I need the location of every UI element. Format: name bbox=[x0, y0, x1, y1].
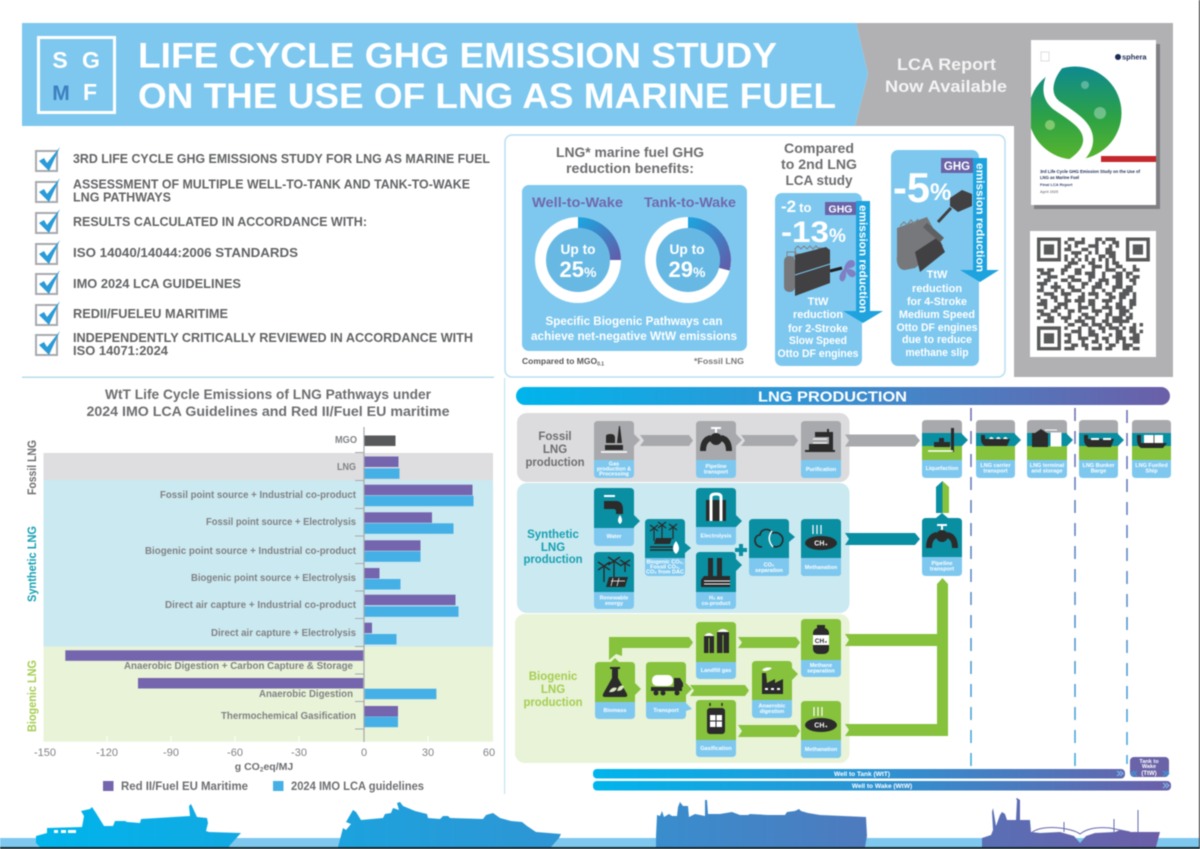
card: purification bbox=[801, 421, 841, 478]
card: 4-stroke engines: due to reduce bbox=[902, 334, 972, 346]
card: biomass: Biomass bbox=[604, 708, 626, 714]
card: methanation bbox=[801, 701, 841, 758]
card: water bbox=[594, 488, 640, 546]
card: renewable energy: energy bbox=[605, 601, 624, 607]
card: methane separation: separation bbox=[807, 668, 836, 674]
arrow: gasification to methanation bbox=[738, 725, 800, 737]
card: anaerobic digestion: digestion bbox=[760, 709, 785, 715]
card: methanation: Methanation bbox=[805, 565, 838, 571]
card: gas production: production & bbox=[597, 466, 631, 472]
donut: up to 25%: Up to bbox=[560, 241, 596, 257]
pathway labels: Direct air capture + Industrial co-product bbox=[165, 599, 356, 611]
card: biomass bbox=[595, 658, 641, 719]
card: purification: Purification bbox=[806, 467, 837, 473]
bar: well to wake bbox=[593, 781, 1171, 790]
bars: Red II/Fuel EU Maritime bbox=[65, 456, 473, 716]
card: LNG terminal and storage bbox=[1027, 420, 1073, 478]
bars: 2024 IMO LCA guidelines bbox=[364, 468, 474, 727]
card: CO2 separation: separation bbox=[755, 568, 784, 574]
donut: up to 29%: Up to bbox=[670, 241, 704, 257]
box: tank to wake: Tank to bbox=[1139, 759, 1159, 765]
card: LNG terminal and storage: LNG terminal bbox=[1030, 463, 1065, 469]
check item 4: ISO 14040/14044:2006 STANDARDS bbox=[73, 246, 298, 260]
pathway labels: Anaerobic Digestion bbox=[259, 688, 353, 700]
chart title: WtT Life Cycle Emissions of LNG Pathways under bbox=[105, 387, 432, 402]
report cover bbox=[1028, 40, 1160, 209]
check item 2 bbox=[36, 178, 470, 204]
arrow: emission reduction: emission reduction bbox=[856, 205, 868, 313]
arrow: transport to anaerobic bbox=[690, 685, 749, 696]
box: tank to wake bbox=[1130, 757, 1169, 777]
card: LNG carrier transport: transport bbox=[983, 468, 1008, 474]
group label: biogenic LNG: Biogenic LNG bbox=[25, 660, 39, 732]
arrow: biogenic supply to pipeline bbox=[845, 578, 948, 736]
card: gas production: Gas bbox=[609, 462, 619, 468]
card: electrolysis: Electrolysis bbox=[701, 534, 731, 540]
card: 2-stroke engines: Slow Speed bbox=[789, 335, 847, 347]
card: methanation: Methanation bbox=[805, 747, 838, 753]
donut: up to 29%: 29% bbox=[669, 257, 706, 282]
card: biogenic CO2 bbox=[645, 519, 691, 576]
pathway labels bbox=[124, 434, 357, 722]
card: CO2 separation: CO₂ bbox=[764, 562, 775, 568]
card: 2-stroke engines: Otto DF engines bbox=[778, 348, 858, 360]
chart title bbox=[86, 387, 450, 419]
card: CO2 separation bbox=[749, 519, 795, 576]
card: transport: Transport bbox=[653, 708, 679, 714]
legend bbox=[103, 781, 424, 793]
legend: Red II/Fuel EU Maritime bbox=[121, 781, 248, 793]
pathway labels: Anaerobic Digestion + Carbon Capture & Storage bbox=[124, 660, 353, 672]
arrow: purification to liquefaction bbox=[845, 434, 920, 446]
card: LNG bunker barge bbox=[1079, 420, 1124, 478]
card: methanation: CH₄ bbox=[814, 540, 828, 548]
footnote: compared to MGO: 0.1 bbox=[597, 362, 604, 368]
card: anaerobic digestion: Anaerobic bbox=[759, 704, 785, 710]
arrow: pipeline to purification bbox=[741, 435, 798, 446]
card: pipeline transport: Pipeline bbox=[931, 561, 953, 567]
ship: cruise ship bbox=[338, 802, 561, 847]
card: LNG fuelled ship: Ship bbox=[1146, 468, 1158, 474]
heading bar: LNG production: LNG PRODUCTION bbox=[758, 388, 907, 406]
pathway labels: Fossil point source + Industrial co-product bbox=[160, 489, 356, 501]
report cover: 3rd Life Cycle GHG Emission Study on the Use of bbox=[1040, 169, 1141, 174]
card: anaerobic digestion bbox=[752, 661, 798, 718]
arrow: emission reduction bbox=[843, 201, 883, 323]
label: GHG bbox=[825, 202, 856, 216]
report cover: April 2025 bbox=[1040, 190, 1058, 194]
card: 2-stroke engines: -13 bbox=[781, 216, 829, 249]
card: gas production bbox=[594, 421, 640, 478]
heading: compared to 2nd study: Compared bbox=[784, 140, 854, 156]
panel: well-to-wake and tank-to-wake donuts: Well-to-Wake bbox=[532, 194, 623, 210]
x axis: eq/MJ bbox=[263, 761, 293, 773]
panel: fossil LNG production: Fossil bbox=[538, 431, 572, 443]
panel: fossil LNG production bbox=[517, 413, 920, 482]
card: 4-stroke engines: -5 bbox=[893, 164, 930, 211]
icon: 4-stroke engine bbox=[897, 190, 972, 272]
x axis: 2 bbox=[260, 766, 264, 774]
bar: well to tank: Well to Tank (WtT) bbox=[834, 771, 890, 778]
pathway labels: LNG bbox=[337, 461, 356, 473]
check item 5: IMO 2024 LCA GUIDELINES bbox=[73, 277, 241, 291]
heading: benefits: LNG* marine fuel GHG bbox=[556, 144, 704, 160]
panel: biogenic LNG production: LNG bbox=[541, 684, 565, 696]
card: liquefaction bbox=[922, 420, 968, 478]
band: fossil bbox=[44, 453, 493, 480]
check item 2: ASSESSMENT OF MULTIPLE WELL-TO-TANK AND TANK-TO-WAKE bbox=[73, 178, 470, 192]
card: biogenic CO2: CO₂ from DAC bbox=[646, 570, 684, 576]
report cover: Final LCA Report bbox=[1040, 182, 1073, 187]
card: 4-stroke engines: reduction bbox=[912, 283, 962, 295]
card: LNG carrier transport: LNG carrier bbox=[980, 463, 1011, 469]
arrow: emission reduction bbox=[960, 158, 999, 282]
panel: well-to-wake and tank-to-wake donuts: Specific Biogenic Pathways can bbox=[546, 316, 722, 328]
card: H2 as co-product: co-product bbox=[702, 601, 731, 607]
card: gasification: Gasification bbox=[700, 746, 732, 752]
panel: fossil LNG production: production bbox=[526, 457, 584, 469]
heading: compared to 2nd study: LCA study bbox=[786, 172, 853, 188]
card: 2-stroke engines: -2to bbox=[781, 197, 811, 216]
report cover: sphera bbox=[1122, 52, 1147, 62]
heading: compared to 2nd study bbox=[781, 140, 857, 188]
panel: biogenic LNG production: Biogenic bbox=[529, 671, 578, 683]
report callout: LCA Report bbox=[897, 55, 996, 74]
footnote: compared to MGO: Compared to MGO bbox=[522, 356, 597, 366]
panel: biogenic LNG production: production bbox=[524, 697, 582, 709]
card: pipeline transport: transport bbox=[930, 566, 954, 572]
card: LNG terminal and storage: and storage bbox=[1031, 468, 1063, 474]
card: LNG bunker barge: Barge bbox=[1091, 468, 1106, 474]
card: 4-stroke engines: TtW bbox=[927, 269, 948, 281]
logo: SGMF: F bbox=[83, 79, 97, 105]
bar: well to tank bbox=[593, 769, 1125, 778]
x axis: -120 bbox=[96, 747, 118, 759]
legend: 2024 IMO LCA guidelines bbox=[291, 781, 424, 793]
card: methanation: CH₄ bbox=[814, 722, 828, 730]
panel: synthetic LNG production: Synthetic bbox=[527, 529, 579, 541]
panel: reduction benefits bbox=[505, 135, 1005, 377]
card: pipeline transport bbox=[696, 421, 742, 478]
card: biogenic CO2: Fossil CO₂, bbox=[650, 564, 680, 570]
card: 4-stroke engines: Otto DF engines bbox=[896, 322, 978, 334]
ship: ferry bbox=[36, 804, 241, 847]
logo: SGMF: G bbox=[82, 47, 100, 73]
card: pipeline transport: Pipeline bbox=[705, 464, 727, 470]
card: 2-stroke engines: for 2-Stroke bbox=[788, 323, 848, 335]
card: water: Water bbox=[606, 534, 622, 540]
x axis: 30 bbox=[422, 747, 434, 759]
card: LNG fuelled ship: LNG Fuelled bbox=[1135, 463, 1168, 469]
card: 2-stroke engines: % bbox=[829, 226, 846, 247]
x axis: -150 bbox=[34, 747, 56, 759]
heading: compared to 2nd study: to 2nd LNG bbox=[781, 156, 857, 172]
check item 2: LNG PATHWAYS bbox=[73, 190, 171, 204]
card: 4-stroke engines: % bbox=[930, 179, 951, 206]
card: renewable energy bbox=[594, 552, 634, 609]
chart title: 2024 IMO LCA Guidelines and Red II/Fuel EU maritime bbox=[86, 404, 450, 419]
box: tank to wake: (TtW) bbox=[1141, 771, 1157, 777]
card: 4-stroke engines bbox=[891, 150, 999, 366]
check item 7: ISO 14071:2024 bbox=[73, 344, 168, 358]
pathway labels: Fossil point source + Electrolysis bbox=[206, 516, 356, 528]
donut: up to 29% bbox=[650, 222, 726, 298]
icon: 2-stroke engine bbox=[784, 246, 856, 296]
box: tank to wake: Wake bbox=[1142, 764, 1156, 770]
header banner bbox=[22, 23, 1173, 377]
heading: benefits: reduction benefits: bbox=[566, 160, 694, 176]
pathway labels: Thermochemical Gasification bbox=[221, 710, 356, 722]
checklist bbox=[36, 147, 490, 358]
chart: WtT life cycle emissions bbox=[25, 387, 495, 793]
LNG production diagram bbox=[515, 387, 1171, 790]
logo: SGMF: S bbox=[52, 47, 68, 73]
card: transport bbox=[646, 662, 692, 719]
card: 4-stroke engines: methane slip bbox=[906, 347, 969, 359]
check item 1: 3RD LIFE CYCLE GHG EMISSIONS STUDY FOR LNG AS MARINE FUEL bbox=[73, 152, 490, 166]
card: methanation bbox=[801, 519, 841, 576]
card: renewable energy: Renewable bbox=[600, 596, 628, 602]
card: 4-stroke engines: for 4-Stroke bbox=[907, 296, 967, 308]
ship silhouettes bbox=[36, 798, 1160, 847]
label: GHG: GHG bbox=[944, 161, 970, 173]
pathway labels: Biogenic point source + Industrial co-product bbox=[145, 545, 356, 557]
card: biogenic CO2: Biogenic CO₂, bbox=[647, 560, 684, 566]
check item 7 bbox=[36, 331, 473, 358]
heading: benefits bbox=[556, 144, 704, 176]
donut: up to 25%: 25% bbox=[560, 257, 597, 282]
card: H2 as co-product: H₂ as bbox=[709, 596, 723, 602]
check item 6: REDII/FUELEU MARITIME bbox=[73, 307, 228, 321]
card: landfill gas bbox=[696, 622, 736, 679]
card: 4-stroke engines: Medium Speed bbox=[899, 309, 975, 321]
x axis: g CO bbox=[235, 761, 260, 773]
check item 1 bbox=[36, 147, 490, 171]
card: LNG bunker barge: LNG Bunker bbox=[1082, 463, 1115, 469]
pathway labels: Biogenic point source + Electrolysis bbox=[191, 572, 356, 584]
card: electrolysis bbox=[696, 488, 742, 545]
card: methane separation: CH₄ bbox=[815, 638, 827, 645]
label: GHG: GHG bbox=[829, 204, 852, 216]
band: synthetic bbox=[44, 480, 493, 647]
label: GHG bbox=[941, 158, 973, 173]
pathway labels: MGO bbox=[335, 434, 357, 446]
panel: synthetic LNG production bbox=[517, 483, 920, 613]
panel: well-to-wake and tank-to-wake donuts bbox=[522, 185, 747, 351]
bottom edge bbox=[0, 847, 1200, 849]
card: pipeline transport bbox=[922, 513, 962, 576]
bar: MGO bbox=[364, 436, 396, 446]
x axis: 0 bbox=[361, 747, 367, 759]
QR code bbox=[1030, 231, 1156, 357]
logo: SGMF: M bbox=[52, 82, 70, 105]
title bbox=[138, 36, 836, 116]
logo: SGMF bbox=[38, 38, 114, 112]
footnote: fossil LNG: *Fossil LNG bbox=[694, 356, 744, 366]
card: liquefaction: Liquefaction bbox=[926, 466, 959, 472]
x axis: -30 bbox=[291, 747, 307, 759]
card: H2 as co-product bbox=[696, 552, 742, 609]
donut: up to 25% bbox=[540, 222, 616, 298]
x axis bbox=[34, 747, 495, 774]
card: 2-stroke engines bbox=[775, 193, 883, 366]
report cover: LNG as Marine Fuel bbox=[1040, 175, 1079, 180]
ship: LNG tanker bbox=[982, 798, 1160, 847]
card: gas production: Processing bbox=[599, 472, 629, 478]
band: biogenic bbox=[44, 647, 493, 742]
ship: car carrier bbox=[656, 800, 867, 847]
check item 5 bbox=[36, 270, 241, 294]
pathway labels: Direct air capture + Electrolysis bbox=[211, 627, 356, 639]
card: 2-stroke engines: reduction bbox=[793, 309, 843, 321]
water band bbox=[0, 838, 1200, 847]
check item 6 bbox=[36, 301, 228, 325]
report callout: Now Available bbox=[885, 77, 1007, 96]
arrow: pipeline to liquefaction bbox=[936, 481, 949, 513]
panel: synthetic LNG production: production bbox=[524, 554, 582, 566]
card: methane separation: Methane bbox=[810, 663, 832, 669]
arrow: fossil gas to pipeline bbox=[640, 435, 693, 446]
group label: synthetic LNG: Synthetic LNG bbox=[25, 526, 39, 602]
arrow: emission reduction: emission reduction bbox=[974, 163, 986, 272]
panel: well-to-wake and tank-to-wake donuts: achieve net-negative WtW emissions bbox=[531, 331, 737, 343]
card: 2-stroke engines: TtW bbox=[808, 296, 829, 308]
card: gasification bbox=[696, 700, 736, 757]
x axis: 60 bbox=[483, 747, 495, 759]
card: LNG carrier transport bbox=[976, 420, 1021, 478]
check item 3 bbox=[36, 209, 367, 233]
icon: plus bbox=[735, 544, 747, 556]
title: ON THE USE OF LNG AS MARINE FUEL bbox=[138, 77, 836, 116]
group label: fossil LNG: Fossil LNG bbox=[25, 440, 39, 495]
card: landfill gas: Landfill gas bbox=[701, 668, 731, 674]
arrow: methanation to pipeline bbox=[845, 533, 920, 545]
title: LIFE CYCLE GHG EMISSION STUDY bbox=[138, 36, 777, 76]
card: methane separation bbox=[801, 619, 841, 677]
card: LNG fuelled ship bbox=[1132, 420, 1171, 478]
card: pipeline transport: transport bbox=[704, 470, 728, 476]
arrow: landfill to methane separation bbox=[738, 637, 800, 648]
panel: synthetic LNG production: LNG bbox=[541, 542, 565, 554]
arrow: biomass to landfill bbox=[609, 637, 693, 660]
x axis: -60 bbox=[227, 747, 243, 759]
heading bar: LNG production bbox=[516, 387, 1170, 406]
check item 3: RESULTS CALCULATED IN ACCORDANCE WITH: bbox=[73, 215, 367, 229]
panel: biogenic LNG production bbox=[515, 614, 850, 763]
check item 4 bbox=[36, 240, 298, 264]
check item 7: INDEPENDENTLY CRITICALLY REVIEWED IN ACCORDANCE WITH bbox=[73, 331, 473, 345]
x axis: -90 bbox=[163, 747, 179, 759]
report callout bbox=[885, 55, 1007, 96]
panel: well-to-wake and tank-to-wake donuts: Tank-to-Wake bbox=[644, 194, 736, 210]
bar: well to wake: Well to Wake (WtW) bbox=[852, 783, 912, 790]
panel: fossil LNG production: LNG bbox=[543, 444, 567, 456]
